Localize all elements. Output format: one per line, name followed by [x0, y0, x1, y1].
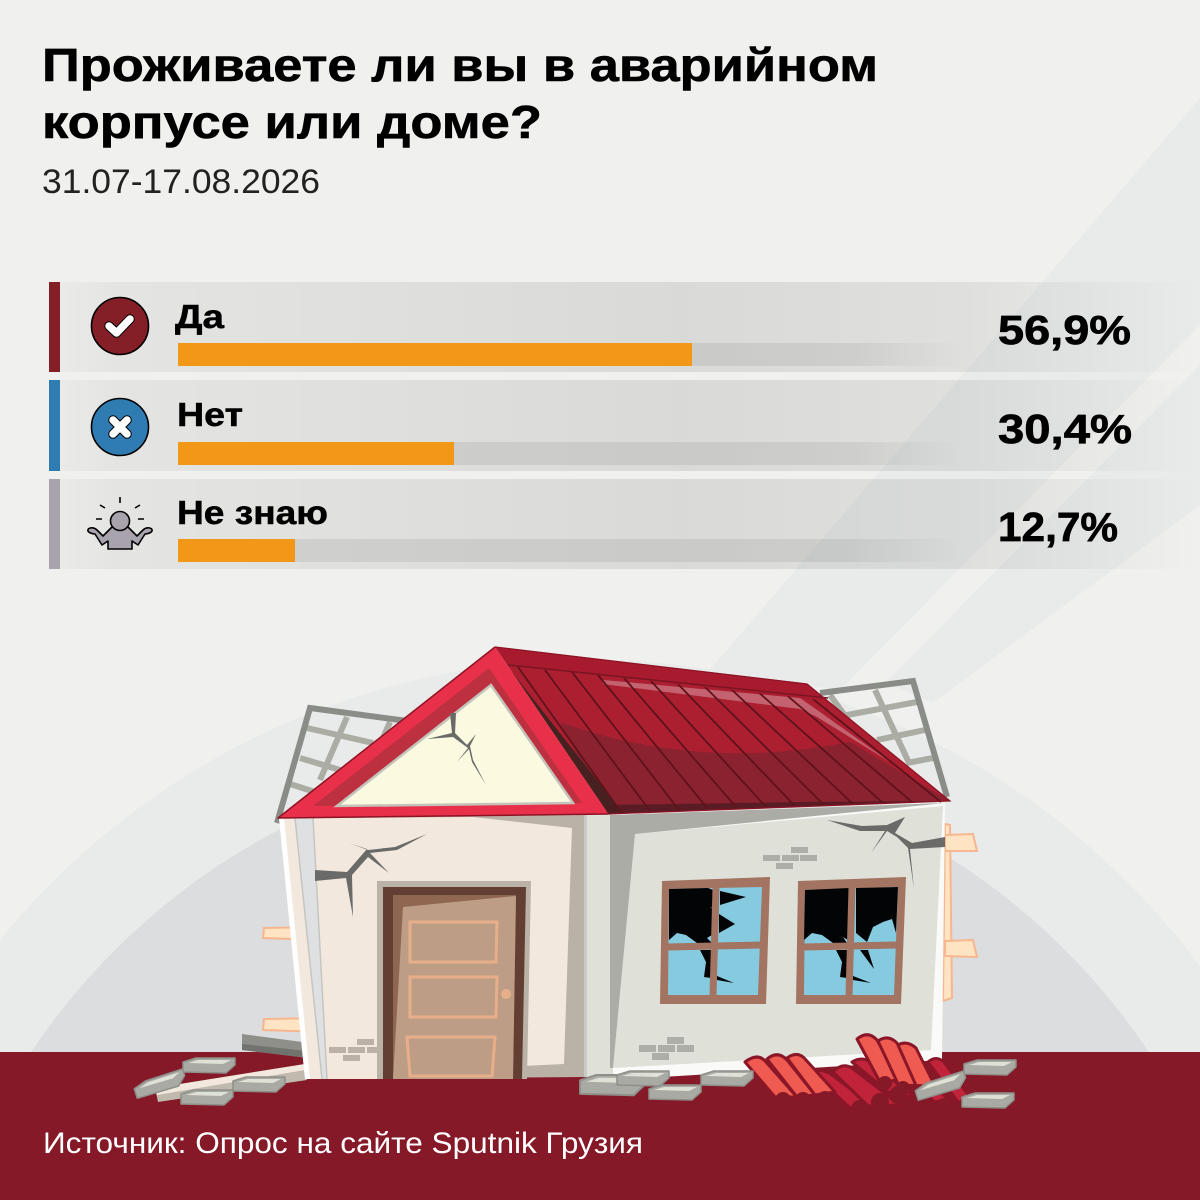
- illustration: damaged house: [133, 647, 1016, 1118]
- value: yes: 56,9%: [998, 307, 1131, 353]
- bar: yes: [178, 343, 692, 366]
- bar: don't know: [178, 539, 295, 562]
- exposed bricks side wall: [639, 847, 817, 1060]
- crack: side wall: [827, 817, 945, 889]
- broken window left: [660, 877, 770, 1004]
- exposed bricks left: [329, 1039, 383, 1061]
- fallen roof tiles: [745, 1035, 972, 1108]
- icon: check: [92, 298, 148, 354]
- footer band: [0, 1052, 1200, 1200]
- row: no: [49, 380, 1200, 471]
- left roof lattice: [277, 708, 415, 823]
- concrete slabs: [133, 1058, 1016, 1108]
- broken window right: [796, 877, 906, 1004]
- right roof lattice: [820, 681, 947, 797]
- crack: front wall: [315, 834, 427, 917]
- date range: 31.07-17.08.2026: [42, 163, 320, 201]
- door: [377, 881, 531, 1079]
- value: no: 30,4%: [998, 406, 1132, 452]
- value: don't know: 12,7%: [998, 504, 1118, 550]
- row: don't know: [49, 479, 1200, 569]
- ground shadow over tiles: [775, 1076, 974, 1118]
- title: [42, 39, 878, 148]
- metal roof: [495, 647, 950, 814]
- fallen grey beam: [242, 1034, 325, 1060]
- front wall: [313, 815, 585, 1079]
- right wooden planks: [943, 824, 977, 1001]
- gable: [278, 647, 608, 818]
- icon: cross: [92, 398, 148, 456]
- row: yes: [49, 282, 1200, 372]
- left wooden planks: [263, 927, 323, 1032]
- label: no: Нет: [177, 396, 243, 433]
- label: yes: Да: [175, 298, 225, 335]
- source note: Источник: Опрос на сайте Sputnik Грузия: [43, 1127, 643, 1160]
- label: don't know: Не знаю: [177, 494, 328, 531]
- side wall: [584, 803, 945, 1080]
- title: Проживаете ли вы в аварийном: [42, 39, 878, 91]
- icon: shrugging person: [88, 497, 152, 549]
- corner column: [279, 818, 327, 1079]
- crack: gable: [427, 713, 486, 785]
- fallen plank: [155, 1064, 307, 1102]
- title: корпусе или доме?: [42, 96, 542, 148]
- bar: no: [178, 442, 454, 465]
